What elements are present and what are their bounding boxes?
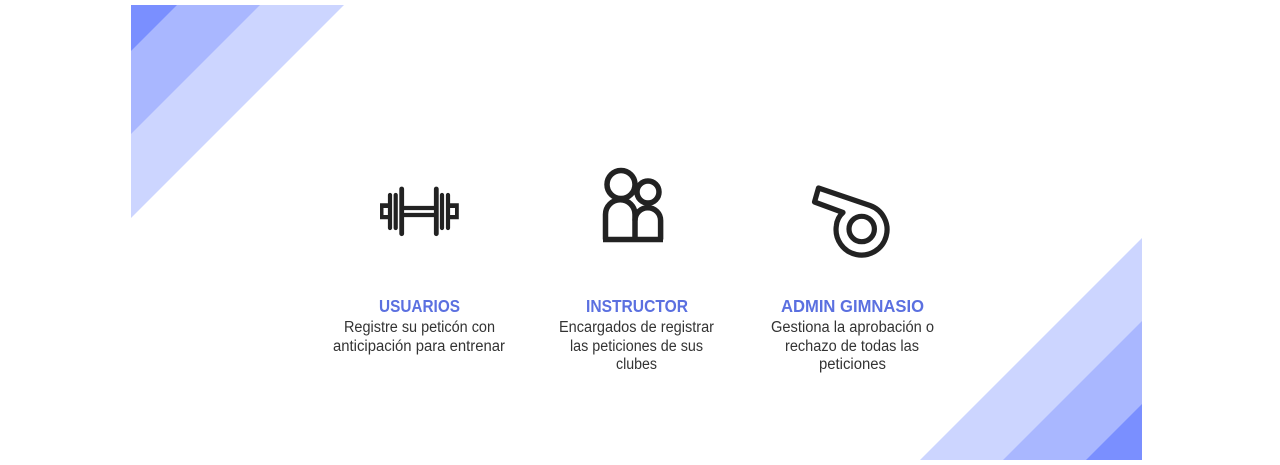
column: admin gimnasio bbox=[771, 296, 934, 373]
text: instructor description: Encargados de registrar bbox=[559, 319, 714, 336]
icon: two people bbox=[603, 170, 663, 240]
heading: instructor: INSTRUCTOR bbox=[586, 296, 688, 316]
decoration: bottom-right stripes bbox=[920, 238, 1142, 460]
column: usuarios bbox=[333, 296, 505, 355]
decoration: top-left stripes bbox=[131, 5, 344, 218]
text: usuarios description: Registre su peticón con bbox=[344, 319, 495, 336]
text: usuarios description bbox=[333, 319, 505, 355]
text: admin description bbox=[771, 319, 934, 373]
text: usuarios description: anticipación para entrenar bbox=[333, 338, 505, 355]
text: admin description: Gestiona la aprobación o bbox=[771, 319, 934, 336]
text: admin description: rechazo de todas las bbox=[785, 338, 919, 355]
heading: admin gimnasio: ADMIN GIMNASIO bbox=[781, 296, 924, 316]
text: instructor description: las peticiones de sus bbox=[570, 338, 703, 355]
column: instructor bbox=[559, 296, 714, 373]
heading: usuarios: USUARIOS bbox=[379, 296, 460, 316]
icon: whistle bbox=[814, 188, 887, 255]
icon: dumbbell bbox=[380, 189, 459, 234]
text: instructor description bbox=[559, 319, 714, 373]
text: admin description: peticiones bbox=[819, 356, 886, 373]
text: instructor description: clubes bbox=[616, 356, 657, 373]
